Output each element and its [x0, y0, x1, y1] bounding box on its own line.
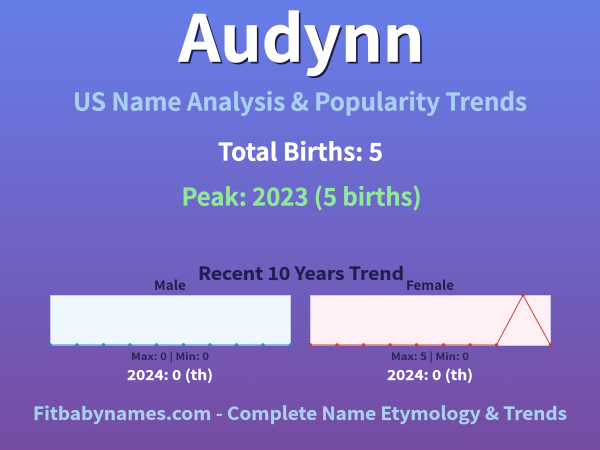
male chart — [49, 296, 292, 347]
female max and min: Max: 5 | Min: 0 — [391, 348, 469, 363]
male max and min: Max: 0 | Min: 0 — [131, 348, 209, 363]
female 2024 value: 2024: 0 (th) — [387, 365, 473, 385]
male 2024 value: 2024: 0 (th) — [127, 365, 213, 385]
peak: Peak: 2023 (5 births) — [182, 178, 422, 212]
footer: Fitbabynames.com - Complete Name Etymology & Trends — [33, 400, 567, 426]
male label: Male — [154, 275, 186, 294]
female label: Female — [406, 275, 454, 294]
panel: female — [309, 275, 552, 385]
subtitle: US Name Analysis & Popularity Trends — [73, 82, 527, 118]
female chart — [309, 293, 552, 347]
section heading: Recent 10 Years Trend — [198, 260, 404, 286]
panel: male — [49, 275, 292, 385]
total births: Total Births: 5 — [218, 132, 383, 168]
